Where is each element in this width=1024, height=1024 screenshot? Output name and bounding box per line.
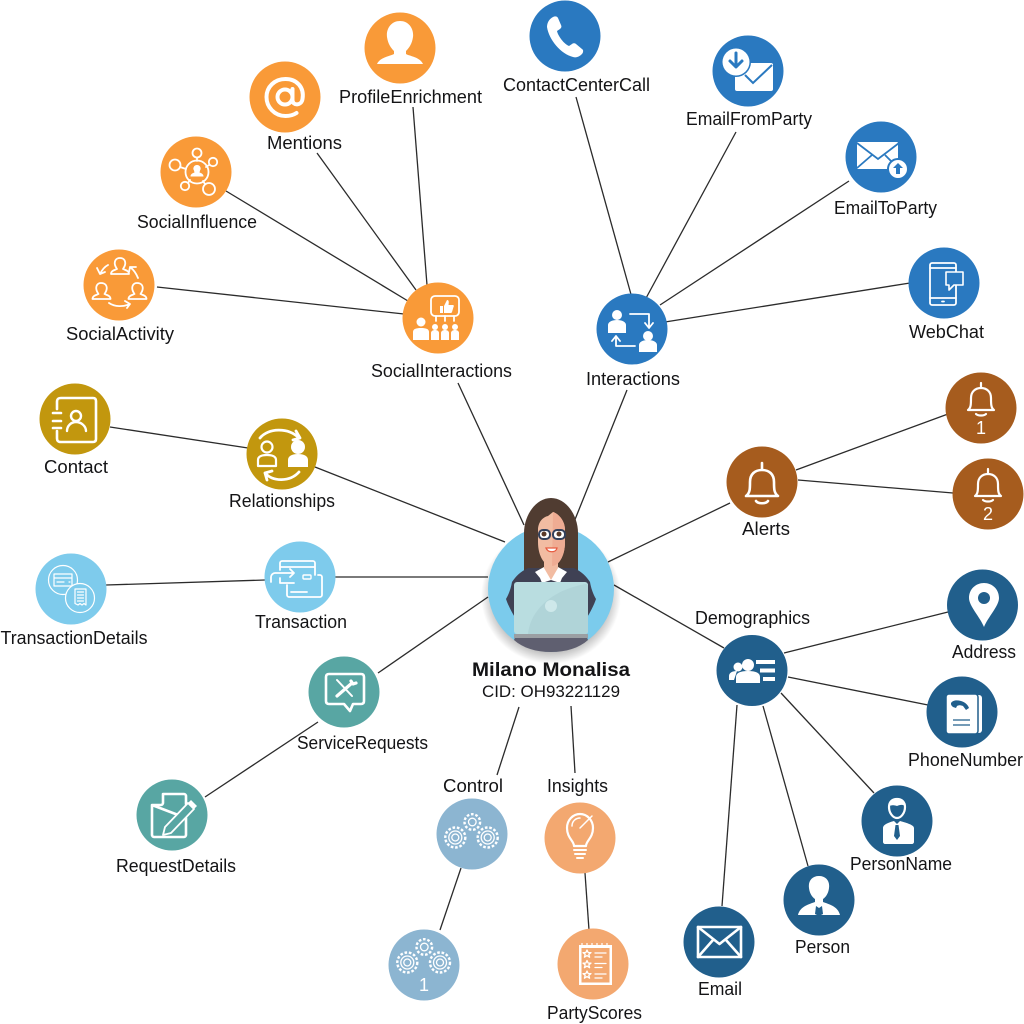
- node: SocialInteractions: [371, 282, 512, 381]
- icon: speech bubble with tools: [326, 674, 364, 711]
- node: Alerts: [726, 446, 798, 539]
- label: Mentions: Mentions: [267, 132, 342, 153]
- label: Control: Control: [443, 775, 503, 796]
- label: 1: 1: [976, 418, 986, 438]
- node: Contact: [40, 384, 110, 477]
- icon: users in a cycle: [92, 258, 146, 308]
- node: RequestDetails: [116, 780, 236, 876]
- node: Relationships: [229, 418, 335, 511]
- icon: light bulb with gauge: [567, 814, 593, 846]
- icon: man with tie: [889, 799, 905, 818]
- label: Alerts: Alerts: [742, 518, 790, 539]
- node: Insights: [544, 775, 616, 874]
- icon: phone book: [955, 695, 982, 733]
- label: Address: Address: [952, 641, 1016, 662]
- icon: bell outline: [975, 469, 1001, 502]
- label: Transaction: Transaction: [255, 611, 347, 632]
- label: PartyScores: PartyScores: [547, 1002, 642, 1023]
- customer ID: CID: OH93221129: [482, 682, 620, 701]
- label: ServiceRequests: ServiceRequests: [297, 732, 428, 753]
- name: Milano Monalisa: [472, 659, 630, 681]
- node: Address: [947, 570, 1018, 662]
- icon: two people with cycle arrows: [262, 442, 272, 452]
- center profile: Milano Monalisa: [472, 498, 630, 701]
- node: Alert 2: [952, 458, 1024, 530]
- icon: envelope: [698, 927, 741, 957]
- node: PersonName: [850, 786, 952, 874]
- label: SocialActivity: SocialActivity: [66, 323, 175, 344]
- avatar shadow: [481, 528, 621, 664]
- icon: three gears: [397, 939, 450, 972]
- node: ServiceRequests: [297, 656, 428, 753]
- icon: influence network: [170, 148, 217, 195]
- label: Relationships: Relationships: [229, 490, 335, 511]
- icon: two people exchanging: [612, 310, 622, 320]
- icon: phone handset: [547, 16, 583, 57]
- icon: card with transfer arrows: [280, 561, 315, 583]
- icon: audience with thumbs up: [413, 296, 459, 340]
- icon: three gears: [445, 814, 498, 848]
- icon: at sign: [266, 79, 303, 116]
- node: Person: [784, 864, 854, 957]
- node: PhoneNumber: [908, 676, 1023, 770]
- node: SocialInfluence: [137, 136, 257, 232]
- node: TransactionDetails: [0, 554, 148, 648]
- label: 2: 2: [983, 504, 993, 524]
- node: WebChat: [908, 248, 984, 342]
- label: SocialInfluence: SocialInfluence: [137, 211, 257, 232]
- label: Email: Email: [698, 978, 742, 999]
- node: SocialActivity: [66, 250, 175, 344]
- label: SocialInteractions: SocialInteractions: [371, 360, 512, 381]
- label: TransactionDetails: TransactionDetails: [0, 627, 148, 648]
- label: EmailToParty: EmailToParty: [834, 197, 938, 218]
- avatar: woman with laptop: [506, 498, 596, 652]
- label: RequestDetails: RequestDetails: [116, 855, 236, 876]
- avatar circle: [488, 526, 614, 652]
- label: ContactCenterCall: ContactCenterCall: [503, 74, 650, 95]
- icon: bell: [746, 463, 778, 503]
- label: ProfileEnrichment: ProfileEnrichment: [339, 86, 482, 107]
- icon: people with list: [742, 659, 754, 671]
- label: 1: 1: [419, 975, 429, 995]
- label: EmailFromParty: EmailFromParty: [686, 108, 813, 129]
- icon: phone with chat bubble: [930, 263, 956, 305]
- node: Control 1: [388, 930, 460, 1000]
- node: Control: [436, 775, 508, 870]
- label: Interactions: Interactions: [586, 368, 680, 389]
- node: PartyScores: [547, 928, 642, 1023]
- label: PersonName: PersonName: [850, 853, 952, 874]
- icon: person bust: [798, 876, 840, 915]
- label: Demographics: Demographics: [695, 607, 810, 628]
- label: Person: Person: [795, 936, 850, 957]
- icon: envelope with download: [735, 63, 773, 91]
- label: Contact: Contact: [44, 456, 108, 477]
- node: Mentions: [250, 62, 342, 153]
- icon: map pin: [969, 583, 999, 627]
- node: Demographics: [695, 607, 810, 706]
- connector lines: [106, 97, 953, 930]
- node: ProfileEnrichment: [339, 12, 482, 107]
- node: ContactCenterCall: [503, 0, 650, 95]
- label: Insights: Insights: [547, 775, 608, 796]
- icon: scorecard: [579, 945, 612, 985]
- icon: bell outline: [968, 383, 994, 416]
- node: Interactions: [586, 294, 680, 389]
- label: PhoneNumber: PhoneNumber: [908, 749, 1023, 770]
- node: Email: [684, 906, 754, 999]
- icon: envelope with upload: [857, 142, 898, 169]
- node: Alert 1: [946, 372, 1016, 444]
- node: EmailFromParty: [686, 36, 813, 129]
- icon: contact card: [57, 398, 96, 442]
- node: Transaction: [255, 542, 347, 632]
- icon: document with pencil: [152, 794, 186, 837]
- node: EmailToParty: [834, 122, 938, 218]
- icon: card and receipt: [48, 566, 78, 594]
- label: WebChat: WebChat: [909, 321, 984, 342]
- icon: profile bust: [377, 21, 423, 64]
